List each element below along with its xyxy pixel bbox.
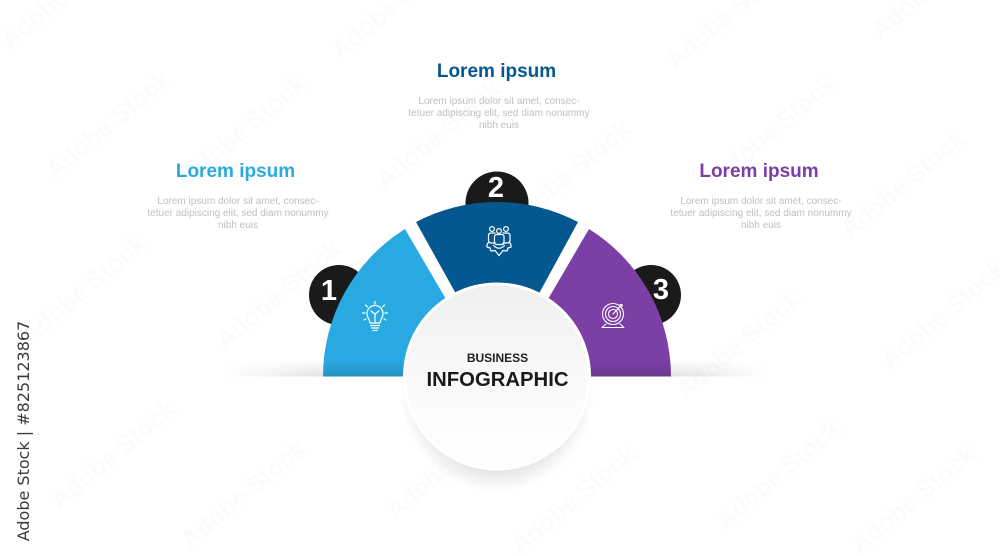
centre circle [403, 282, 591, 470]
text: Adobe Stock [176, 70, 311, 190]
text: Adobe Stock [371, 75, 506, 195]
icon: light bulb [362, 302, 388, 330]
text block: step 2: nibh euis [479, 120, 519, 131]
semicircle diagram [253, 172, 742, 485]
number badge 3 [621, 265, 681, 325]
number badge 2: 2 [488, 172, 504, 204]
text block: step 1: tetuer adipiscing elit, sed diam nonummy [147, 208, 329, 219]
text block: step 2: Lorem ipsum dolor sit amet, consec- [418, 96, 580, 107]
text: Adobe Stock [176, 435, 311, 555]
text block: step 1: nibh euis [218, 220, 258, 231]
text: Adobe Stock [501, 115, 636, 235]
segment 2: dark blue [416, 202, 578, 310]
segment 3: purple [544, 229, 671, 376]
text block: step 2: tetuer adipiscing elit, sed diam nonummy [408, 108, 590, 119]
icon: team with gear [487, 227, 511, 256]
text: Adobe Stock [706, 70, 841, 190]
stock credit: Adobe Stock | #825123867 [14, 321, 33, 541]
text block: step 3: nibh euis [741, 220, 781, 231]
number badge 1 [309, 265, 369, 325]
text: Adobe Stock [381, 405, 516, 525]
text: Adobe Stock [46, 395, 181, 515]
heading: step 3: Lorem ipsum [699, 161, 819, 182]
number badge 2 [466, 172, 528, 234]
text block: step 3: Lorem ipsum dolor sit amet, consec- [680, 196, 842, 207]
centre title: infographic: INFOGRAPHIC [427, 369, 569, 391]
text: Adobe Stock [41, 65, 176, 185]
text: Adobe Stock [671, 285, 806, 405]
segment 1: light blue [323, 229, 450, 376]
heading: step 2: Lorem ipsum [437, 61, 556, 82]
text: Adobe Stock [211, 235, 346, 355]
text block: step 2 [408, 96, 590, 131]
text: Adobe Stock [711, 415, 846, 535]
shadow band at the base [253, 364, 742, 376]
centre title: business: BUSINESS [467, 351, 528, 365]
text block: step 3: tetuer adipiscing elit, sed diam nonummy [670, 208, 852, 219]
shadow under centre circle [400, 288, 594, 492]
text: Adobe Stock [836, 125, 971, 245]
text: Adobe Stock [16, 230, 151, 350]
text block: step 1 [147, 196, 329, 231]
heading: step 1: Lorem ipsum [176, 161, 295, 182]
number badge 3: 3 [653, 274, 669, 306]
text block: step 1: Lorem ipsum dolor sit amet, consec- [157, 196, 319, 207]
number badge 1: 1 [321, 275, 337, 307]
text block: step 3 [670, 196, 852, 231]
icon: target [602, 304, 624, 328]
